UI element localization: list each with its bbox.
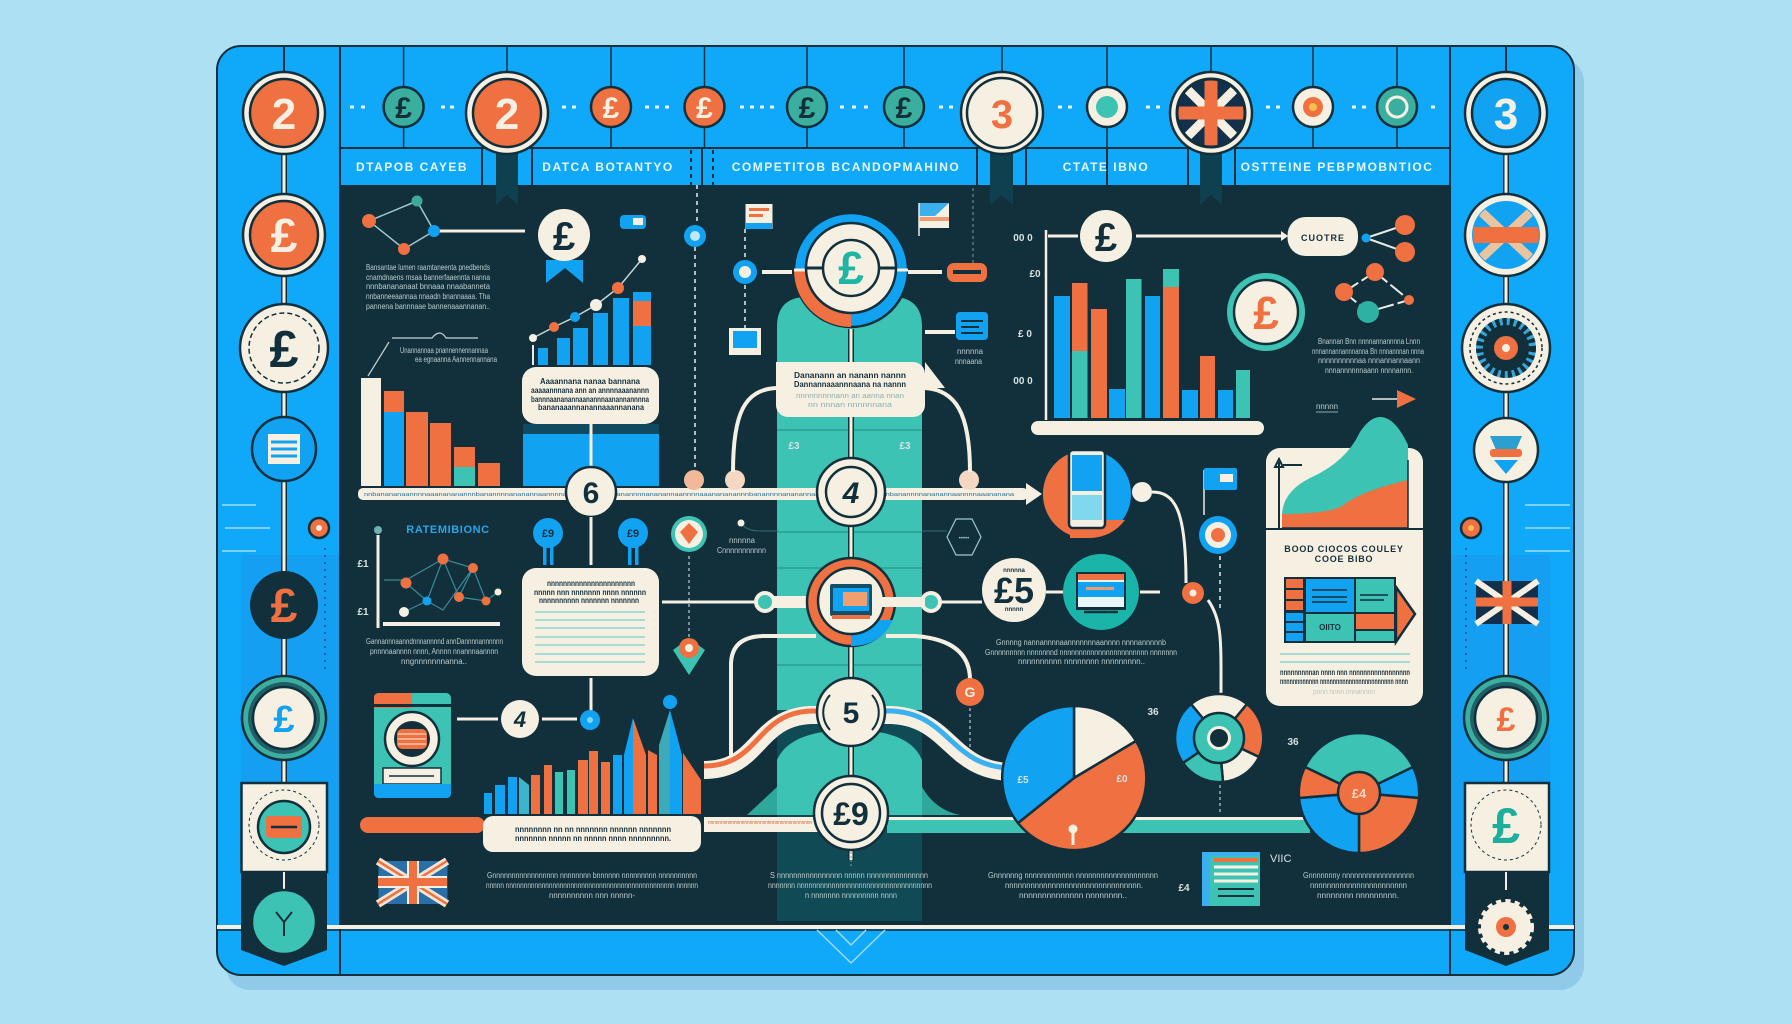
teal ring coin bbox=[1227, 273, 1305, 351]
timeline bar bbox=[358, 483, 1042, 505]
orange arrow: nnnnn bbox=[1316, 402, 1338, 411]
middle-left network chart: £1 bbox=[357, 607, 369, 618]
middle-left network chart bbox=[357, 524, 502, 628]
header labels: CTATE IBNO bbox=[1063, 160, 1149, 174]
top coin: number 2 left: 2 bbox=[272, 90, 296, 139]
bottom document icon: £4 bbox=[1178, 883, 1190, 894]
top coin: number 3 bbox=[961, 72, 1043, 154]
bottom document icon bbox=[1178, 852, 1291, 906]
bottom text block 1: nnnnnnnnnn nnn nnnnn- bbox=[549, 891, 635, 900]
pound nine node bbox=[814, 776, 888, 868]
document card right: nnnnnnnnnnnn nnnnnnnnnnnnnnnnnnnnnnn nnnn bbox=[1280, 677, 1408, 686]
right bar chart: £ 0 bbox=[1018, 329, 1032, 340]
top coin: number 2: 2 bbox=[495, 90, 519, 139]
text block top-left: Bansantae lumen raamtaneenta pnedbends bbox=[366, 263, 490, 272]
top center medallion bbox=[794, 213, 908, 327]
small pound coins bbox=[384, 87, 924, 127]
small pound coins: £ bbox=[696, 92, 713, 125]
text block right bbox=[1312, 337, 1424, 375]
number 4 node: 4 bbox=[842, 477, 860, 510]
center callout bbox=[776, 362, 945, 417]
teal orange badge with note: nnnnna bbox=[729, 536, 756, 545]
pie chart large bbox=[1002, 706, 1146, 850]
small pound coins: £ bbox=[603, 92, 620, 125]
donut chart: 36 bbox=[1147, 707, 1159, 718]
left rail coins: £ bbox=[270, 321, 299, 379]
lower timeline bars: nnnnnnnnnnnnnnnnnnnnnnnnnnnnnnnnnnnnnnnn bbox=[708, 820, 812, 826]
callout top-left: aaaaannnana ann an annnnaaanannn bbox=[531, 386, 649, 395]
header labels: DTAPOB CAYEB bbox=[356, 160, 468, 174]
rising bar chart bbox=[529, 255, 651, 365]
left rail coins: £ bbox=[271, 210, 298, 263]
bottom document icon: VIIC bbox=[1270, 853, 1291, 865]
callout top-left bbox=[522, 367, 659, 424]
right rail icons: £ bbox=[1497, 701, 1516, 739]
blue pin badges: £9 bbox=[627, 528, 639, 540]
right nodes of medallion: nnnnna bbox=[957, 347, 984, 356]
text block right: Bnannan Bnn nnnnannannnna Lnnn bbox=[1318, 337, 1420, 346]
network diagram top-left bbox=[362, 196, 525, 255]
orange coin lower bbox=[913, 636, 984, 748]
bottom text block 1 bbox=[486, 871, 698, 900]
left rail coins bbox=[240, 194, 329, 760]
center teal column bbox=[747, 297, 960, 921]
pound five coin bbox=[982, 558, 1046, 622]
callout top-left: bananaaannanannaaannanana bbox=[538, 403, 644, 412]
connector to medal bbox=[662, 591, 810, 613]
text block top-left: nnnbanananaat bnnaaa nnaabanneta bbox=[366, 282, 491, 291]
pie chart right: £4 bbox=[1352, 786, 1367, 801]
right rail icons bbox=[1461, 194, 1550, 760]
text block center right: Gnnnng nannannnnaannnnnnnaannnn nnnnannnnnb bbox=[996, 638, 1166, 647]
text block top-left: pannena bannnaae bannenaaannanan.. bbox=[366, 302, 490, 311]
bottom text block 3: nnnnnnnnnnnnnn nnnnnnnn.. bbox=[1019, 891, 1127, 900]
middle-left network chart: £1 bbox=[357, 559, 369, 570]
center callout: Dannannaaannnaana na nannn bbox=[794, 380, 906, 389]
lower timeline bars bbox=[704, 817, 1310, 833]
number 4 small node bbox=[457, 700, 600, 738]
pill label and nodes: CUOTRE bbox=[1301, 233, 1345, 243]
caption box: nnnnnnnn nn nn nnnnnnn nnnnnn nnnnnnn bbox=[515, 825, 671, 834]
pound five coin: nnnnna bbox=[1003, 568, 1025, 574]
teal orange badge with note: Cnnnnnnnnnnn bbox=[717, 546, 766, 555]
text block center right: nnnnnnnnnn nnnnnnnn nnnnnnnnn.. bbox=[1018, 657, 1145, 666]
bottom text block 4: nnnnnnnnnnnnnnnnnnnnnnn bbox=[1310, 881, 1407, 890]
left rail coins: £ bbox=[273, 699, 295, 741]
right bar chart bbox=[1013, 230, 1264, 435]
left rail coins: £ bbox=[271, 580, 298, 633]
hexagon badge bbox=[922, 519, 981, 555]
bottom text block 2: nnnnnnn nnnnnnnnnnnnnnnnnnnnnnnnnnnnnnnnnnn bbox=[768, 881, 932, 890]
bottom text block 1: nnnnn nnnnnnnnnnnnnnnnnnnnnnnnnnnnnnnnnnnnnnnnnnnnnnn nnnnnn bbox=[486, 881, 698, 890]
right nodes of medallion: nnnaana bbox=[955, 357, 982, 366]
knob markers bbox=[684, 470, 979, 490]
document card right: pnnn nnnn nnnannnn bbox=[1313, 689, 1375, 696]
flowing ribbon bbox=[704, 711, 1010, 772]
text block right: nnnannannannnanna Bn nnnannnan nnna bbox=[1312, 347, 1424, 356]
bottom text block 3 bbox=[988, 871, 1158, 900]
text block top-left bbox=[366, 263, 491, 311]
curved connectors bbox=[731, 388, 970, 757]
top coin: number 2 left bbox=[243, 72, 325, 154]
pound nine node: £9 bbox=[833, 796, 869, 832]
ribbon pound badge: £ bbox=[553, 215, 575, 259]
document card right: nnnnnnnnnan nnnn nnn nnnnnnnnnnnnnnnnn bbox=[1280, 668, 1410, 677]
center callout: nn nnnan nnnnnnana bbox=[808, 402, 892, 409]
center medal bbox=[807, 558, 895, 646]
header labels: OSTTEINE PEBPMOBNTIOC bbox=[1241, 160, 1433, 174]
right bar chart: 00 0 bbox=[1013, 233, 1033, 244]
document card right bbox=[1266, 417, 1423, 706]
header labels: COMPETITOB BCANDOPMAHINO bbox=[732, 160, 960, 174]
small pound coins: £ bbox=[896, 92, 913, 125]
lower-left icon card bbox=[374, 693, 451, 798]
UK flag medallion top bbox=[1170, 72, 1252, 154]
spiked bar chart bbox=[484, 695, 701, 814]
document callout middle: nnnnnnnnnnnnnnnnnnnnnn bbox=[547, 579, 635, 588]
right connector to pound five bbox=[880, 591, 1160, 613]
pie chart large: £0 bbox=[1116, 774, 1128, 785]
orange bar bbox=[360, 817, 485, 833]
ribbons bbox=[496, 148, 1222, 205]
bottom text block 1: Gnnnnnnnnnnnnnnnnn nnnnnnnn bnnnnnn nnnnnnnnn nnnnnnnnnn bbox=[487, 871, 697, 880]
center callout: Dananann an nanann nannn bbox=[794, 371, 906, 380]
hexagon badge: ••••• bbox=[959, 536, 969, 542]
ribbon pound badge bbox=[538, 209, 646, 283]
pound coin with arrow bbox=[1048, 210, 1288, 262]
dashed pin connector bbox=[673, 556, 705, 675]
teal ring coin: £ bbox=[1253, 287, 1279, 339]
document card right: COOE BIBO bbox=[1315, 554, 1373, 564]
callout top-left: Aaaannana nanaa bannana bbox=[540, 377, 641, 386]
annotation bbox=[368, 333, 497, 376]
dashed connector bbox=[684, 185, 706, 472]
top center medallion: £ bbox=[838, 242, 864, 294]
text block middle-left: Gannannnaanndnnnannnnd annDannnnannnnnn bbox=[366, 637, 503, 646]
number 5 node bbox=[817, 678, 885, 746]
small pound coins: £ bbox=[395, 92, 412, 125]
right card and gear bbox=[1465, 783, 1549, 966]
number 4 small node: 4 bbox=[513, 707, 526, 732]
pie chart right bbox=[1287, 733, 1419, 853]
teal orange badge with note bbox=[671, 516, 778, 555]
blue block under callout bbox=[523, 424, 659, 486]
document callout middle: nnnnnnnnnn nnnnnnn nnnnnnn bbox=[539, 596, 639, 605]
bottom text block 3: Gnnnnnng nnnnnnnnnnnn nnnnnnnnnnnnnnnnnnnn bbox=[988, 871, 1158, 880]
callout top-left: bannnaananannaanannnaanannannnna bbox=[531, 395, 649, 404]
text block right: nnnnnnnnnnaa nnnannannaann bbox=[1318, 356, 1420, 365]
orange node bbox=[1182, 582, 1204, 604]
timeline bar: nnbanananaannnnaaanananannnbanannnnananannaannnnaaanananannnbanannnnananannaannnnaaanananannnbanannnnananannaannnnaaanananannnnbanannnnananannaannnnaaananana bbox=[364, 492, 1015, 498]
orange arrow bbox=[1316, 390, 1416, 412]
right coin: number 3: 3 bbox=[1494, 90, 1518, 139]
main frame bbox=[217, 46, 1574, 975]
text block center right bbox=[985, 638, 1177, 666]
orange coin lower: G bbox=[965, 684, 976, 700]
right nodes of medallion bbox=[908, 188, 988, 366]
right bar chart: £0 bbox=[1029, 269, 1041, 280]
phone icon circle bbox=[1043, 450, 1131, 538]
number 6 node bbox=[566, 467, 616, 525]
text block top-left: nnbanneeaannaa nnaadn bnannaaaa. Tha bbox=[366, 292, 490, 301]
left nodes of medallion bbox=[729, 204, 792, 355]
number 6 node: 6 bbox=[583, 477, 599, 510]
right card and gear: £ bbox=[1492, 798, 1520, 854]
bottom text block 4: nnnnnnnn nnnnnnnnn. bbox=[1317, 891, 1399, 900]
monitor circle bbox=[1063, 554, 1139, 630]
donut chart bbox=[1147, 694, 1263, 815]
text block middle-left bbox=[366, 637, 503, 666]
small emblem coins bbox=[1087, 87, 1417, 127]
caption box bbox=[483, 816, 701, 852]
pie chart large: £5 bbox=[1017, 775, 1029, 786]
center callout: nnnnnnnnnann an aanna nnan bbox=[796, 393, 904, 400]
pill label and nodes bbox=[1288, 215, 1415, 262]
bottom text block 4: Gnnnnnnny nnnnnnnnnnnnnnnnnn bbox=[1303, 871, 1414, 880]
bottom text block 4 bbox=[1303, 871, 1414, 900]
bottom text block 2 bbox=[768, 871, 932, 900]
text block top-left: cnamdnaens rnsaa bannerfaaennta nanna bbox=[366, 273, 490, 282]
pound five coin: £5 bbox=[994, 570, 1034, 611]
teal column small labels: £3 bbox=[899, 441, 911, 452]
top band dotted connectors bbox=[350, 106, 1435, 108]
header labels: DATCA BOTANTYO bbox=[542, 160, 674, 174]
blue pin badges bbox=[533, 518, 648, 565]
header labels bbox=[356, 160, 1433, 174]
pound five coin: nnnnn bbox=[1005, 607, 1023, 613]
left card and clock bbox=[241, 783, 327, 966]
bottom text block 2: n nnnnnnn nnnnnnnnn nnnn bbox=[805, 891, 897, 900]
top coin: number 2 bbox=[466, 72, 548, 154]
number 4 node bbox=[817, 458, 885, 526]
blue pin badges: £9 bbox=[542, 528, 554, 540]
text block middle-left: nngnnnnnnnanna.. bbox=[401, 657, 467, 666]
pie chart right: 36 bbox=[1287, 737, 1299, 748]
bottom text block 3: nnnnnnnnnnnnnnnnnnnnnnnnnnnnnnnn. bbox=[1005, 881, 1143, 890]
right coin: number 3 bbox=[1465, 72, 1547, 154]
document card right: OIITO bbox=[1319, 623, 1341, 632]
text block center right: Gnnnnnnnnn nnnnnnnd nnnnnnnnnnnnnnnnnnnnnnn nnnnnnn bbox=[985, 648, 1177, 657]
text block middle-left: pnnnnaannnn nnnn, Annnn nnannnaannnn bbox=[370, 647, 498, 656]
annotation: ea egnaanna Aannennannana bbox=[415, 355, 497, 364]
annotation: Unannannaa pnannennennannaa bbox=[400, 346, 488, 355]
flag and target bbox=[1199, 468, 1237, 612]
text block right: nnnannnnnnaann nnnnannn. bbox=[1325, 366, 1413, 375]
document callout middle: nnnnn nnn nnnnnnn nnnn nnnnnn bbox=[534, 588, 646, 597]
small pound coins: £ bbox=[799, 92, 816, 125]
bottom text block 2: S nnnnnnnnnnnnnnnn nnnnn nnnnnnnnnnnnnnn bbox=[770, 871, 928, 880]
number 5 node: 5 bbox=[843, 697, 859, 730]
network diagram right bbox=[1335, 263, 1414, 323]
UK flag bottom-left bbox=[378, 861, 448, 904]
right bar chart: 00 0 bbox=[1013, 376, 1033, 387]
pound coin with arrow: £ bbox=[1095, 216, 1117, 260]
document card right: BOOD CIOCOS COULEY bbox=[1284, 544, 1404, 554]
teal column small labels bbox=[788, 441, 911, 452]
teal column small labels: £3 bbox=[788, 441, 800, 452]
caption box: nnnnnnn nnnnn nn nnnnn nnnn nnnnnnnnn. bbox=[515, 834, 671, 843]
bar chart left bbox=[361, 378, 500, 486]
top coin: number 3: 3 bbox=[991, 93, 1013, 137]
connector and knob from phone bbox=[1132, 482, 1221, 693]
middle-left network chart: RATEMIBIONC bbox=[406, 524, 490, 536]
document callout middle bbox=[522, 517, 659, 712]
